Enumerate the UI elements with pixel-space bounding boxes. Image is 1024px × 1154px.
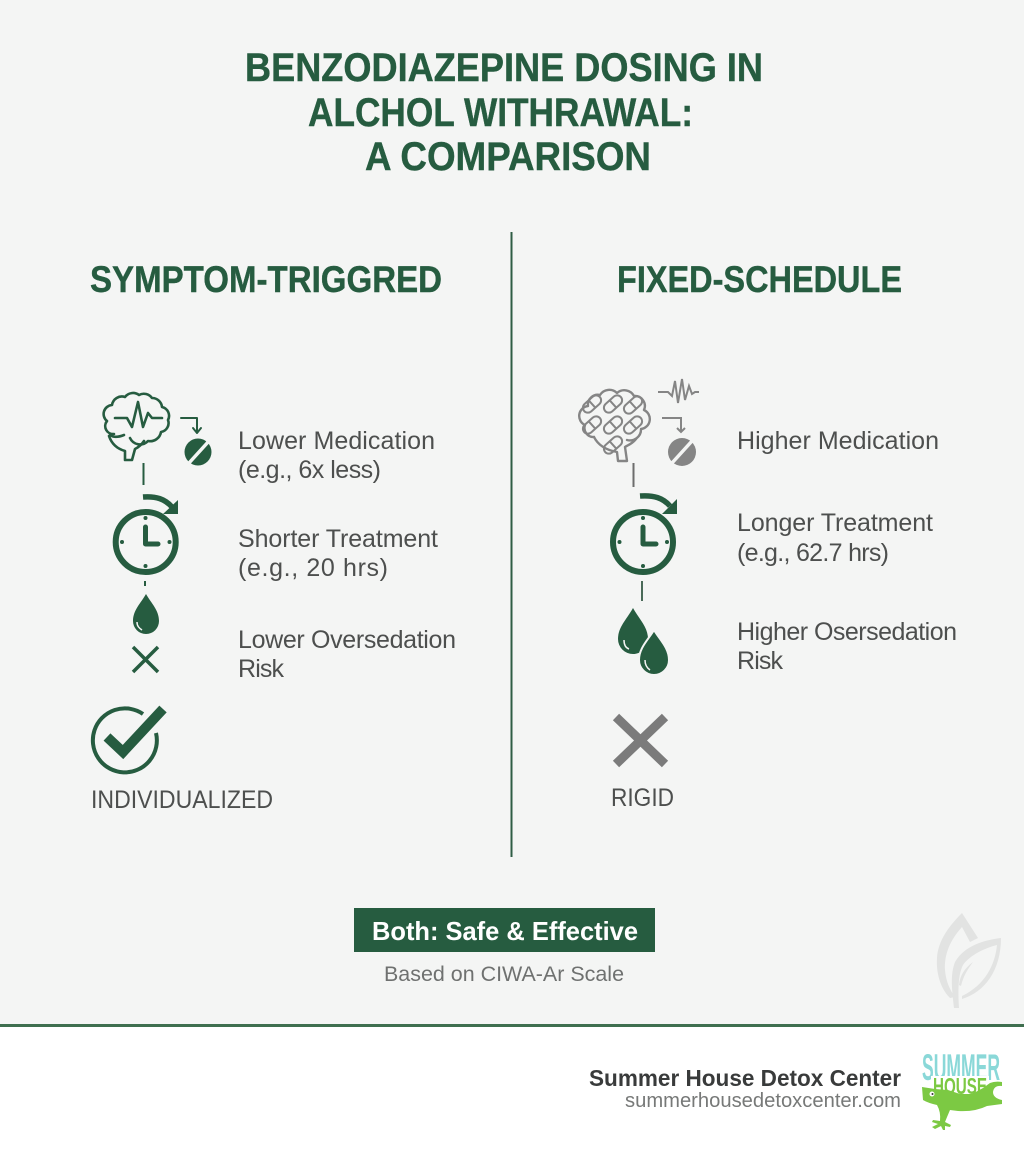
text: lower oversedation: Risk bbox=[238, 655, 284, 683]
text: lower oversedation: Lower Oversedation bbox=[238, 626, 456, 654]
heading: symptom-triggered: SYMPTOM-TRIGGRED bbox=[90, 259, 442, 300]
footer band bbox=[0, 1024, 1024, 1154]
logo: summer house gecko bbox=[922, 1047, 1002, 1130]
panel: symptom-triggered icons and text bbox=[91, 393, 456, 814]
text: lower medication: Lower Medication bbox=[238, 427, 435, 455]
footer: organization name: Summer House Detox Center bbox=[589, 1065, 901, 1091]
text: longer treatment: Longer Treatment bbox=[737, 509, 933, 537]
icon: drop bbox=[133, 594, 159, 634]
title: A COMPARISON bbox=[365, 135, 651, 179]
text: shorter treatment: Shorter Treatment bbox=[238, 525, 438, 553]
icon: leaf watermark bbox=[937, 913, 1001, 1008]
text: lower medication bbox=[238, 427, 435, 484]
icon: cross bbox=[133, 647, 158, 672]
icon: two drops bbox=[618, 608, 669, 675]
badge: both safe and effective: Both: Safe & Effective bbox=[372, 916, 638, 946]
label: rigid: RIGID bbox=[611, 784, 674, 812]
icon: pill bbox=[184, 438, 212, 466]
icon: clock bbox=[613, 496, 677, 572]
icon: clock bbox=[116, 497, 178, 572]
icon: brain with pills bbox=[579, 390, 650, 461]
icon: erratic pulse bbox=[658, 379, 699, 403]
title: BENZODIAZEPINE DOSING IN bbox=[245, 46, 763, 90]
note: based on CIWA-Ar scale: Based on CIWA-Ar Scale bbox=[384, 963, 624, 986]
icon: check circle bbox=[93, 708, 163, 772]
title: ALCHOL WITHRAWAL: bbox=[308, 91, 693, 135]
panel: fixed-schedule icons and text bbox=[579, 379, 957, 812]
title bbox=[245, 46, 763, 179]
text: higher medication: Higher Medication bbox=[737, 427, 939, 455]
icon: grey pill bbox=[668, 438, 696, 466]
icon: brain with heartbeat bbox=[104, 393, 201, 460]
text: lower oversedation bbox=[238, 626, 456, 683]
text: lower medication: (e.g., 6x less) bbox=[238, 456, 381, 484]
footer: website: summerhousedetoxcenter.com bbox=[625, 1090, 901, 1112]
text: higher osersedation: Higher Osersedation bbox=[737, 618, 957, 646]
text: longer treatment: (e.g., 62.7 hrs) bbox=[737, 539, 889, 567]
text: longer treatment bbox=[737, 509, 933, 567]
icon: grey cross bbox=[616, 717, 665, 764]
heading: fixed-schedule: FIXED-SCHEDULE bbox=[617, 259, 902, 300]
label: individualized: INDIVIDUALIZED bbox=[91, 786, 273, 814]
badge: both safe and effective bbox=[354, 908, 655, 952]
text: higher osersedation: Risk bbox=[737, 647, 784, 675]
text: higher osersedation bbox=[737, 618, 957, 675]
text: shorter treatment: (e.g., 20 hrs) bbox=[238, 554, 388, 582]
logo: summer house gecko: HOUSE bbox=[933, 1073, 987, 1099]
text: shorter treatment bbox=[238, 525, 438, 582]
